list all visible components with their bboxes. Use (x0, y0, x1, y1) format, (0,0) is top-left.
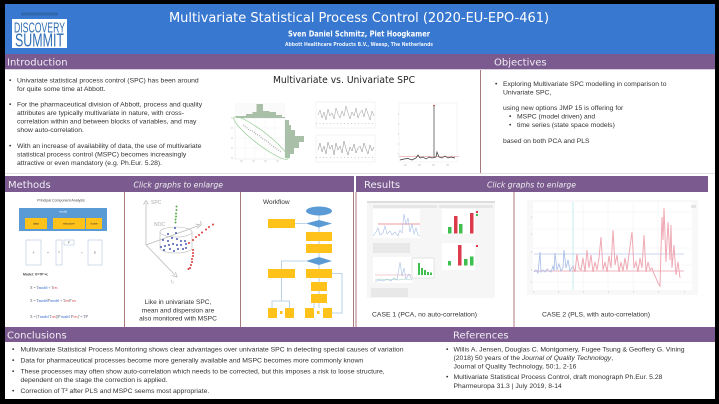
panel: introduction text: • (9, 102, 12, 108)
panel: introduction text: attractive or even mandatory (e.g. Ph.Eur. 5.28). (17, 160, 162, 167)
panel: references text: Willis A. Jensen, Douglas C. Montgomery, Fugee Tsung & Geoffery G. Vining (454, 346, 685, 354)
monitored series (573, 208, 680, 286)
panel: references text: • (446, 374, 449, 381)
flowchart: workflow: Workflow (263, 199, 290, 206)
diagram: principal component analysis: X = [Tmodel Tres][P'model P'res]' = TP' (30, 315, 88, 319)
panel: references text: Pharmeuropa 31.3 | July 2019, 8-14 (454, 383, 562, 390)
panel: introduction text: show auto-correlation. (17, 127, 84, 134)
header banner (5, 4, 715, 54)
panel: conclusions text: Data for pharmaceutical processes become more generally available and MSPC becomes more commonly known (20, 358, 363, 364)
panel: conclusions text: Multivariate Statistical Process Monitoring shows clear advantages over univariate SPC in detecting special causes of variation (20, 346, 404, 354)
diagram: principal component analysis (19, 198, 107, 319)
affiliation: Abbott Healthcare Products B.V., Weesp, The Netherlands (285, 42, 434, 48)
panel: references text: Multivariate Statistical Process Control, draft monograph Ph.Eur. 5.28 (454, 374, 663, 381)
diagram: principal component analysis: + (81, 250, 83, 254)
diagram: principal component analysis: X (33, 250, 35, 254)
logo: Discovery Summit (12, 12, 67, 50)
caption: case 2: CASE 2 (PLS, with auto-correlation) (542, 312, 650, 318)
summary table 2 (371, 288, 408, 297)
diagram: principal component analysis: X = Tmodel + Tres (30, 286, 58, 290)
panel: references text (446, 346, 685, 390)
contribution bars 1 (442, 209, 475, 234)
panel: objectives text: based on both PCA and PLS (503, 138, 590, 145)
panel: conclusions text (12, 346, 404, 395)
panel: objectives text: time series (state space models) (517, 122, 615, 129)
panel: objectives text: MSPC (model driven) and (517, 114, 595, 120)
heading band: methods: Methods (8, 180, 51, 191)
panel: introduction text: For the pharmaceutical division of Abbott, process and quality (17, 102, 203, 108)
caption: mean and dispersion: Like in univariate SPC, (145, 299, 212, 306)
T2 chart 2 (373, 257, 412, 283)
diagram: principal component analysis: = (47, 250, 49, 254)
heading band: Introduction and Objectives: Objectives (494, 58, 547, 68)
panel: conclusions text: Correction of T² after PLS and MSPC seems most appropriate. (20, 388, 209, 395)
caption: mean and dispersion: also monitored with MSPC (139, 316, 217, 322)
diagram: 3D SPC space: SPC (151, 200, 162, 206)
diagram: principal component analysis: E (94, 250, 96, 254)
diagram: 3D SPC space (144, 200, 214, 284)
green out-of-control points (174, 206, 178, 224)
panel: introduction text (9, 78, 203, 167)
red out-of-control points (188, 224, 214, 270)
diagram: 3D SPC space: t₁ (200, 220, 203, 225)
panel: references text: • (446, 346, 449, 354)
panel: objectives text: Univariate SPC, (503, 90, 551, 96)
caption: mean and dispersion (139, 299, 217, 322)
heading band: methods (5, 176, 354, 192)
logo: Discovery Summit: DISCOVERY (14, 20, 65, 36)
panel dividers (124, 192, 514, 327)
panel: introduction text: attributes are typically multivariate in nature, with cross- (17, 110, 184, 117)
panel: introduction text: • (9, 143, 12, 150)
diagram: principal component analysis: Principal Component Analysis (37, 198, 85, 202)
panel: introduction text: correlation within and between blocks of variables, and may (17, 118, 197, 126)
divider (480, 70, 482, 173)
legends (476, 211, 478, 247)
T-squared chart with spike (398, 103, 459, 165)
panel: introduction text: Univariate statistical process control (SPC) has been around (17, 78, 199, 84)
panel: conclusions text: dependent on the stage the correction is applied. (20, 377, 168, 384)
diagram: 3D SPC space: NOC (154, 222, 166, 228)
flow arrows (272, 215, 342, 313)
panel: objectives text: • (509, 122, 512, 129)
panel: objectives text: Exploring Multivariate SPC modelling in comparison to (503, 81, 667, 88)
model box: data (33, 222, 39, 226)
heading band: results: Click graphs to enlarge (487, 180, 576, 190)
panel: introduction text: With an increase of availability of data, the use of multivariate (17, 143, 202, 150)
chart: case 1 JMP report (367, 201, 495, 298)
panel: introduction text: • (9, 78, 12, 84)
panel: introduction text: for quite some time at Abbott. (17, 86, 106, 93)
diagram: principal component analysis: T (58, 250, 60, 254)
panel: references text: Journal of Quality Technology, 50:1, 2-16 (454, 364, 577, 370)
contribution bars 2 (442, 243, 475, 270)
diagram: principal component analysis: X = TmodelP'model + TresP'res (30, 299, 77, 303)
heading band: conclusions and references (5, 327, 715, 342)
panel: conclusions text: • (12, 368, 15, 376)
heading band: conclusions and references: References (453, 330, 509, 342)
matrix decomposition (26, 240, 102, 265)
heading band: methods: Click graphs to enlarge (134, 180, 223, 190)
panel: objectives text: • (509, 114, 512, 120)
flowchart: workflow (263, 199, 342, 318)
caption: case 1: CASE 1 (PCA, no auto-correlation) (372, 312, 477, 318)
panel: references text: (2018) 50 years of the Journal of Quality Technology, (454, 355, 613, 362)
panel: conclusions text: • (12, 358, 15, 364)
authors: Sven Daniel Schmitz, Piet Hoogkamer (288, 30, 430, 38)
chart heading: multivariate vs univariate: Multivariate vs. Univariate SPC (273, 75, 415, 86)
heading band: conclusions and references: Conclusions (7, 330, 67, 342)
panel: conclusions text: These processes may often show auto-correlation which needs to be corrected, but this imposes a risk to loose structure, (20, 368, 385, 376)
panel: objectives text: • (495, 81, 498, 88)
diagram: 3D SPC space: t₂ (171, 279, 174, 284)
panel: objectives text (495, 81, 667, 145)
NOC cylinder (160, 227, 192, 253)
inset bar chart (412, 258, 434, 278)
heading band: Introduction and Objectives (5, 54, 715, 70)
model box: noise (90, 222, 98, 226)
heading band: Introduction and Objectives: Introduction (7, 58, 68, 68)
panel: conclusions text: • (12, 388, 15, 395)
summary table 1 (373, 243, 410, 253)
caption: mean and dispersion: mean and dispersion are (142, 308, 215, 314)
model box: model (59, 210, 67, 214)
title: Multivariate Statistical Process Control (2020-EU-EPO-461) (169, 11, 549, 26)
equations: Model: X=TP'+ε (23, 272, 48, 276)
panel: introduction text: statistical process control (MSPC) becomes increasingly (17, 152, 187, 158)
model box: structure (63, 222, 75, 226)
scatter chart with marginal histograms (230, 103, 304, 164)
T2 chart 1 (373, 209, 420, 238)
run charts: univariate control charts (316, 102, 375, 162)
model box (19, 208, 107, 231)
heading band: results (356, 176, 708, 192)
in-control series (534, 250, 573, 273)
chart: case 2 control chart (527, 200, 698, 295)
diagram: principal component analysis: P' (68, 240, 71, 244)
logo: Discovery Summit: SUMMIT (15, 30, 64, 50)
heading band: results: Results (364, 180, 400, 191)
panel: objectives text: using new options JMP 15 is offering for (503, 105, 624, 112)
flow nodes (268, 206, 332, 318)
panel: conclusions text: • (12, 346, 15, 354)
blue in-control points (160, 227, 187, 252)
